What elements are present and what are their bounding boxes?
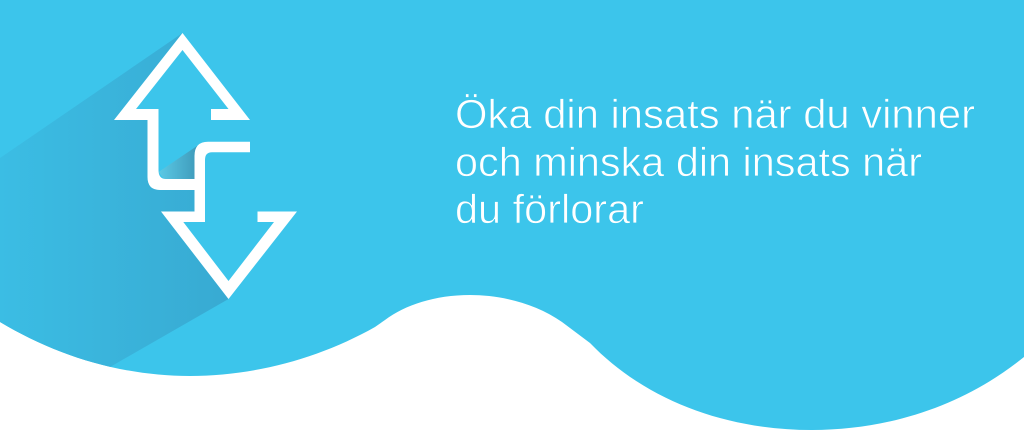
headline line 2: och minska din insats när	[455, 139, 922, 185]
icon: up and down arrows	[114, 33, 297, 299]
icon: up arrow	[114, 33, 250, 190]
icon: down arrow	[161, 142, 297, 299]
headline line 3: du förlorar	[455, 186, 644, 232]
headline text	[455, 91, 975, 232]
headline line 1: Öka din insats när du vinner	[455, 91, 975, 137]
fold shadow inside up arrow	[158, 146, 197, 179]
long shadow of the arrow icon	[0, 33, 228, 367]
